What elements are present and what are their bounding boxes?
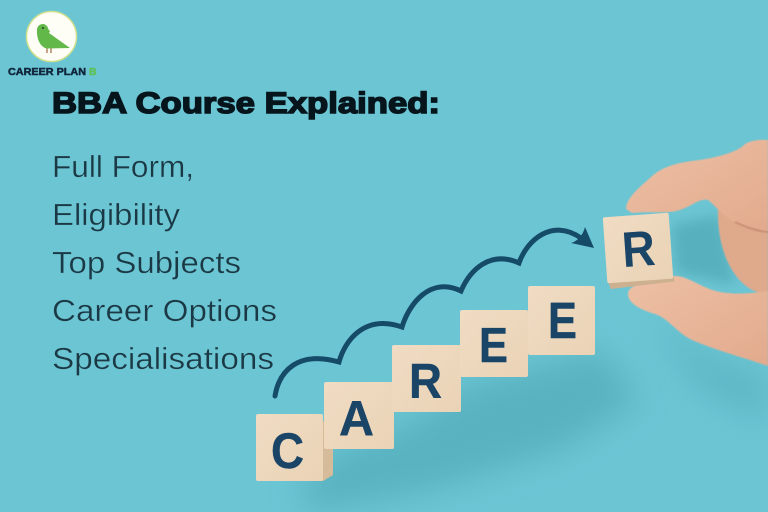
topic list <box>52 149 277 376</box>
block R: R <box>409 355 442 409</box>
block R <box>392 345 461 412</box>
block A: A <box>339 392 374 446</box>
block E upper <box>528 286 595 355</box>
rising arrow <box>275 227 594 396</box>
block E <box>460 310 528 377</box>
finger crease <box>735 222 768 232</box>
block C: C <box>271 423 304 479</box>
thumb <box>628 276 768 366</box>
logo wordmark: CAREER PLAN <box>8 66 86 78</box>
block E upper: E <box>548 292 577 349</box>
title: BBA Course Explained: <box>52 87 440 120</box>
block R held in fingers: R <box>620 220 657 278</box>
logo <box>8 12 97 78</box>
index finger <box>626 140 768 232</box>
list item: eligibility: Eligibility <box>52 197 181 232</box>
hand <box>626 140 768 366</box>
list item: top subjects: Top Subjects <box>52 245 241 280</box>
logo badge <box>26 12 76 62</box>
block A <box>324 382 394 449</box>
block E: E <box>479 319 508 373</box>
list item: career options: Career Options <box>52 293 277 328</box>
arrow head <box>571 227 594 248</box>
wooden blocks <box>256 286 595 481</box>
block C <box>256 414 333 481</box>
icon: green bird <box>37 24 70 53</box>
block and hand shadows <box>300 215 768 512</box>
middle finger <box>718 205 768 293</box>
list item: specialisations: Specialisations <box>52 341 274 376</box>
list item: full form: Full Form, <box>52 149 194 184</box>
block R held in fingers <box>603 213 675 289</box>
logo wordmark B: B <box>89 66 97 78</box>
